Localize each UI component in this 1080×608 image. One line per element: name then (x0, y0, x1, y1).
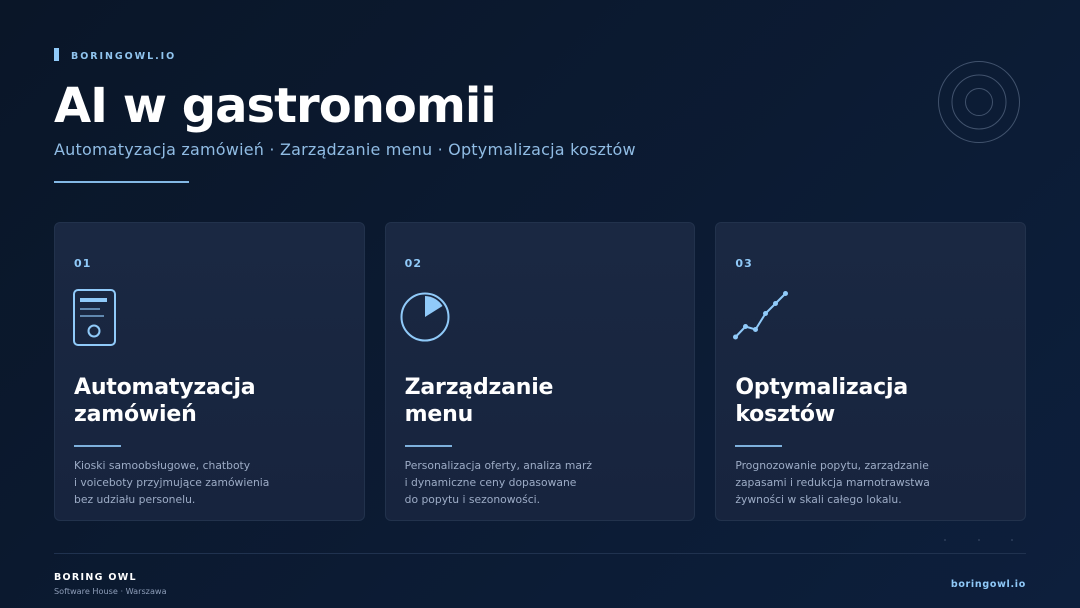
panel: optymalizacja kosztów (715, 222, 1026, 521)
card description: i voiceboty przyjmujące zamówienia (74, 476, 269, 489)
brand label: BORINGOWL.IO (71, 50, 176, 62)
card heading (735, 375, 908, 427)
icon: concentric circles (938, 61, 1020, 143)
card heading: menu (405, 402, 473, 427)
card heading (74, 375, 255, 427)
card description (74, 459, 269, 506)
card heading: Optymalizacja (735, 375, 908, 400)
panel: automatyzacja zamówień (54, 222, 365, 521)
decorative dots (944, 539, 1013, 541)
icon: pie chart (400, 292, 450, 342)
card number 03: 03 (735, 257, 753, 270)
card description: do popytu i sezonowości. (405, 493, 540, 506)
card description: zapasami i redukcja marnotrawstwa (735, 476, 930, 489)
card heading: zamówień (74, 402, 197, 427)
card description: żywności w skali całego lokalu. (735, 493, 902, 506)
panel: zarządzanie menu (385, 222, 695, 521)
icon: kiosk (73, 289, 116, 346)
card description: Personalizacja oferty, analiza marż (405, 459, 592, 472)
card number 01: 01 (74, 257, 92, 270)
footer subtitle: Software House · Warszawa (54, 586, 167, 596)
card description: i dynamiczne ceny dopasowane (405, 476, 576, 489)
icon: trend line (733, 291, 788, 340)
card description: Prognozowanie popytu, zarządzanie (735, 459, 929, 472)
card heading: kosztów (735, 402, 835, 427)
card description: Kioski samoobsługowe, chatboty (74, 459, 250, 472)
card number 02: 02 (405, 257, 422, 270)
brand marker (54, 48, 59, 61)
card heading: Automatyzacja (74, 375, 255, 400)
subtitle: Automatyzacja zamówień · Zarządzanie menu · Optymalizacja kosztów (54, 140, 636, 159)
footer brand: BORING OWL (54, 572, 137, 583)
card description (405, 459, 592, 506)
card heading (405, 375, 553, 427)
card description: bez udziału personelu. (74, 493, 195, 506)
title: AI w gastronomii (54, 78, 496, 134)
card heading: Zarządzanie (405, 375, 553, 400)
title underline (54, 181, 189, 183)
card description (735, 459, 930, 506)
footer divider (54, 553, 1026, 554)
footer url: boringowl.io (951, 579, 1026, 590)
